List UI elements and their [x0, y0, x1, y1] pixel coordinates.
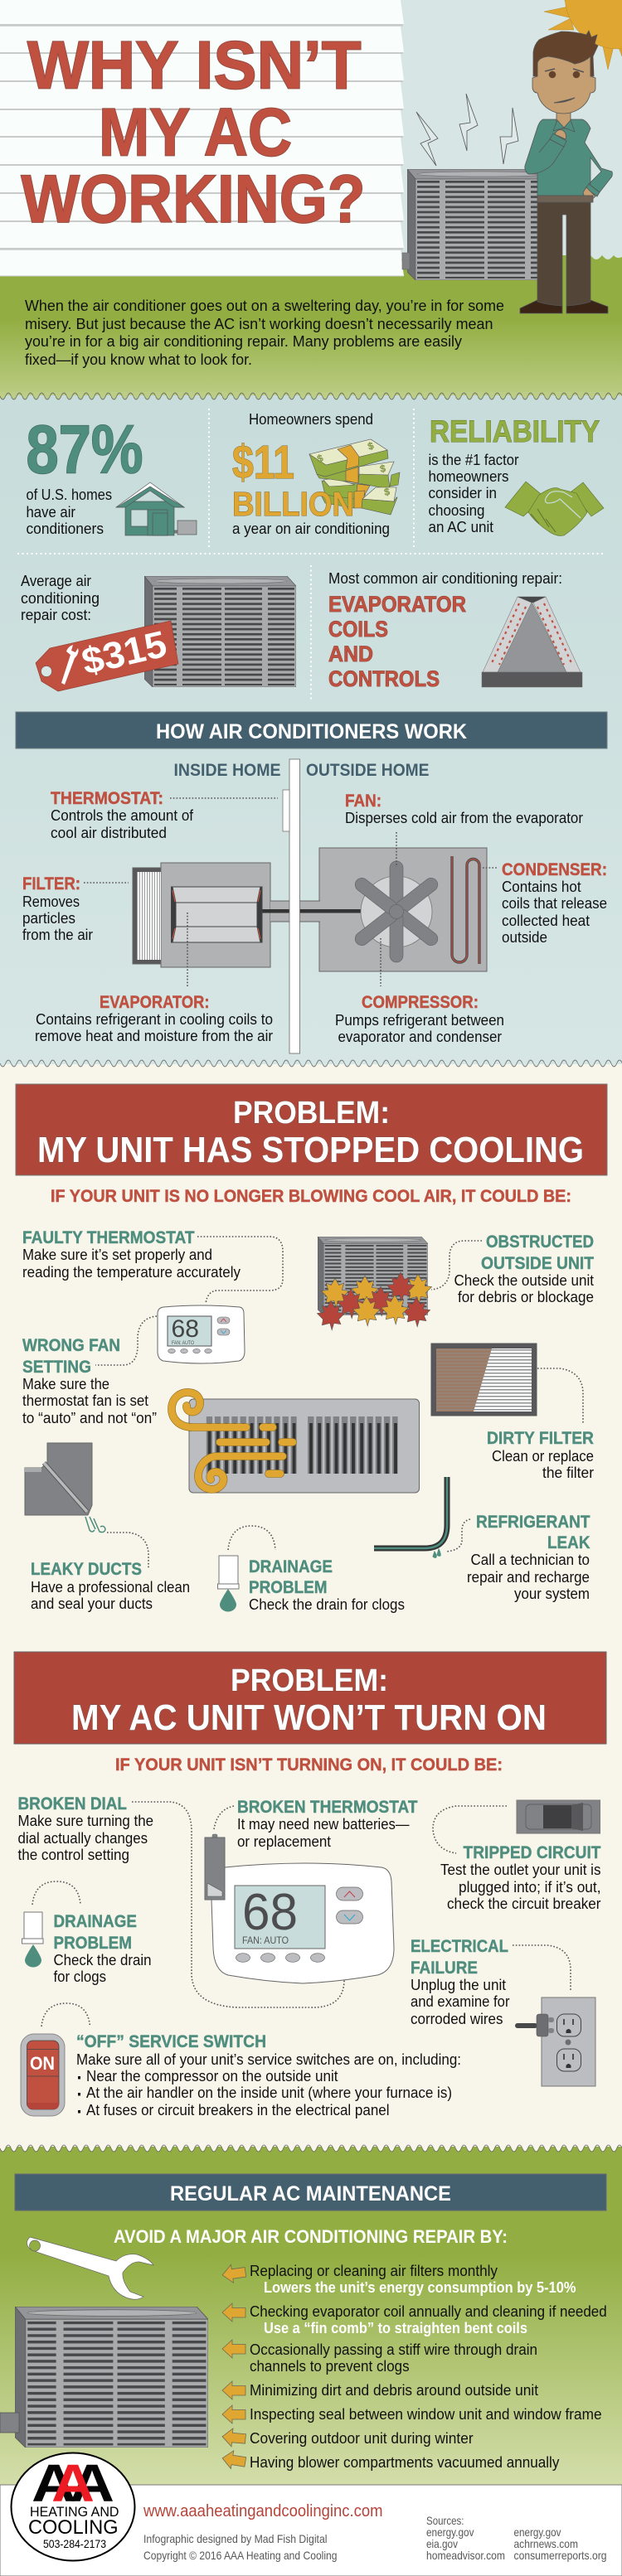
label: fan: [345, 792, 583, 826]
label: compressor: COMPRESSOR:: [362, 993, 479, 1012]
stat caption: of U.S. homes: [27, 487, 112, 503]
label: condenser: [502, 860, 607, 946]
item: tripped circuit text: check the circuit breaker: [447, 1896, 600, 1912]
icon: money stacks: $: [316, 452, 325, 465]
icon: battery: [205, 1834, 225, 1900]
maintenance checklist: [250, 2263, 607, 2471]
stat caption: choosing: [428, 502, 484, 519]
icon: handshake: [505, 482, 604, 535]
label: inside home: INSIDE HOME: [174, 761, 280, 780]
maintenance checklist: Inspecting seal between window unit and window frame: [250, 2406, 602, 2423]
stat caption: conditioners: [27, 521, 104, 537]
stat caption: consider in: [428, 485, 497, 501]
icon: evaporator coil: [482, 597, 582, 687]
item: refrigerant leak text: REFRIGERANT: [476, 1513, 590, 1532]
intro text: When the air conditioner goes out on a sweltering day, you’re in for some: [25, 298, 504, 314]
item: broken dial: BROKEN DIAL: [18, 1794, 127, 1813]
section background: stats and how it works: [0, 395, 622, 1067]
item: obstructed outside unit: for debris or blockage: [458, 1289, 594, 1305]
stat heading: RELIABILITY: [430, 414, 600, 448]
item: dirty filter text: Clean or replace: [492, 1448, 594, 1465]
label: condenser: coils that release: [502, 895, 607, 912]
icon: money stacks: $: [367, 439, 376, 453]
logo: AAA Heating and Cooling: [12, 2453, 134, 2561]
item: drainage problem text: Check the drain: [53, 1952, 151, 1968]
item: obstructed outside unit: Check the outside unit: [454, 1272, 594, 1289]
item: drainage problem text: DRAINAGE: [53, 1912, 137, 1931]
banner: problem 2: [14, 1652, 606, 1744]
item: broken dial: Make sure turning the: [18, 1813, 153, 1829]
panel: most common repair: [328, 570, 582, 691]
stat number: 87%: [27, 411, 143, 487]
intro text: misery. But just because the AC isn’t working doesn’t necessarily mean: [25, 316, 493, 332]
item: off service switch: Near the compressor on the outside unit: [86, 2068, 338, 2085]
section heading: regular AC maintenance: [15, 2174, 606, 2210]
item: drainage problem text: PROBLEM: [249, 1578, 327, 1597]
item: broken thermostat: or replacement: [237, 1833, 331, 1850]
item: electrical failure: and examine for: [411, 1993, 510, 2010]
footer: sources: Sources:: [426, 2514, 464, 2527]
item: dirty filter text: DIRTY FILTER: [487, 1429, 594, 1448]
footer: sources: energy.gov: [514, 2525, 561, 2539]
caption: Most common air conditioning repair:: [328, 570, 562, 587]
label: fan: Disperses cold air from the evaporator: [345, 810, 583, 826]
item: obstructed outside unit: OBSTRUCTED: [486, 1232, 594, 1252]
maintenance checklist: Having blower compartments vacuumed annually: [250, 2454, 559, 2471]
leader lines: problem 2: [32, 1802, 571, 2026]
icon: house with AC: [116, 482, 197, 535]
icon: wrench: [27, 2237, 153, 2299]
subheading: problem 2: IF YOUR UNIT ISN’T TURNING ON, IT COULD BE:: [115, 1755, 503, 1775]
highlighted heading: AND: [328, 642, 373, 666]
item: electrical failure: FAILURE: [411, 1959, 478, 1978]
logo: AAA Heating and Cooling: A: [32, 2453, 76, 2513]
footer: sources: achrnews.com: [514, 2537, 578, 2550]
item: off service switch: At the air handler on the inside unit (where your furnace is): [86, 2085, 452, 2101]
item: electrical failure: corroded wires: [411, 2011, 503, 2027]
item: drainage problem text: PROBLEM: [53, 1934, 132, 1953]
icon: large thermostat: [211, 1863, 394, 1983]
footer: sources: eia.gov: [426, 2537, 458, 2550]
icon: on switch: [21, 2034, 65, 2116]
item: off service switch: At fuses or circuit breakers in the electrical panel: [86, 2102, 390, 2118]
icon: money stacks: [309, 439, 400, 515]
subheading: problem 1: IF YOUR UNIT IS NO LONGER BLOWING COOL AIR, IT COULD BE:: [51, 1187, 571, 1206]
label: filter: FILTER:: [22, 874, 80, 893]
icon: large thermostat: FAN: AUTO: [242, 1934, 289, 1946]
maintenance checklist: channels to prevent clogs: [250, 2358, 410, 2375]
intro text: fixed—if you know what to look for.: [25, 351, 252, 368]
maintenance checklist: Covering outdoor unit during winter: [250, 2430, 474, 2447]
scalloped edge: stats to problems: [0, 1059, 622, 1068]
item: leaky ducts text: LEAKY DUCTS: [31, 1560, 142, 1579]
item: drainage problem text: Check the drain for clogs: [249, 1596, 405, 1613]
stat caption: is the #1 factor: [428, 452, 519, 468]
maintenance checklist: Replacing or cleaning air filters monthly: [250, 2263, 498, 2279]
label: thermostat: THERMOSTAT:: [51, 789, 163, 808]
scalloped edge: grass to stats: [0, 392, 622, 400]
maintenance checklist: Use a “fin comb” to straighten bent coils: [264, 2320, 527, 2336]
caption: [21, 573, 100, 623]
item: refrigerant leak text: your system: [514, 1586, 590, 1602]
item: electrical failure: ELECTRICAL: [411, 1937, 508, 1956]
item: wrong fan setting: Make sure the: [22, 1376, 109, 1392]
icon: small thermostat: 68: [171, 1315, 199, 1343]
item: refrigerant leak text: Call a technician to: [471, 1552, 590, 1568]
title: WHY ISN’T: [27, 28, 362, 103]
logo: AAA Heating and Cooling: 503-284-2173: [43, 2537, 106, 2550]
item: broken dial: dial actually changes: [18, 1830, 148, 1847]
label: compressor: evaporator and condenser: [338, 1029, 502, 1045]
label: filter: particles: [22, 910, 75, 927]
label: thermostat: [51, 789, 194, 841]
item: refrigerant leak text: LEAK: [547, 1533, 590, 1552]
maintenance checklist: Occasionally passing a stiff wire through drain: [250, 2341, 537, 2358]
panel: stat reliability: [428, 414, 604, 535]
label: evaporator: [35, 993, 273, 1044]
leader lines: problem 1: [95, 1237, 583, 1568]
title: [22, 28, 365, 237]
stat caption: [27, 487, 112, 537]
panel: stat 11 billion: [232, 411, 400, 537]
icon: dirty filter: [431, 1344, 537, 1416]
label: evaporator: Contains refrigerant in cooling coils to: [36, 1011, 273, 1028]
item: wrong fan setting: to “auto” and not “on”: [22, 1410, 157, 1426]
icon: drain pipe with drop: [22, 1912, 43, 1968]
illustration: confused man: [520, 31, 612, 313]
diagram: condenser coil: [452, 856, 479, 964]
logo: AAA Heating and Cooling: COOLING: [28, 2516, 118, 2539]
icon: leaky duct: [25, 1443, 105, 1533]
item: electrical failure: Unplug the unit: [411, 1977, 506, 1993]
icon: on switch: ON: [30, 2053, 55, 2074]
stat caption: homeowners: [428, 468, 509, 485]
item: faulty thermostat: FAULTY THERMOSTAT: [22, 1228, 195, 1247]
item: wrong fan setting: SETTING: [22, 1358, 91, 1377]
intro text: you’re in for a big air conditioning repair. Many problems are easily: [25, 333, 462, 350]
label: evaporator: remove heat and moisture from the air: [35, 1028, 273, 1044]
label: fan: FAN:: [345, 792, 381, 811]
item: refrigerant leak text: [467, 1513, 590, 1602]
logo: AAA Heating and Cooling: HEATING AND: [30, 2505, 119, 2520]
item: broken dial: the control setting: [18, 1847, 129, 1863]
section background: footer: [0, 2485, 622, 2576]
item: off service switch: Make sure all of your unit’s service switches are on, including:: [76, 2051, 461, 2068]
illustration: sun: [544, 0, 622, 70]
caption: repair cost:: [21, 607, 91, 623]
footer: website: www.aaaheatingandcoolinginc.com: [143, 2502, 383, 2520]
icon: arrows: [221, 2263, 247, 2471]
item: electrical failure: [411, 1937, 510, 2027]
footer: credits: [143, 2532, 337, 2562]
item: tripped circuit text: plugged into; if it’s out,: [459, 1879, 600, 1896]
label: condenser: CONDENSER:: [502, 860, 607, 879]
item: wrong fan setting: thermostat fan is set: [22, 1392, 148, 1409]
item: faulty thermostat: Make sure it’s set properly and: [22, 1247, 212, 1263]
section heading: regular AC maintenance: REGULAR AC MAINTENANCE: [170, 2182, 451, 2206]
panel: average repair cost: [21, 573, 296, 691]
icon: small thermostat: [158, 1305, 245, 1363]
icon: drain pipe with drop: [217, 1556, 239, 1611]
item: broken thermostat: It may need new batteries—: [237, 1816, 410, 1833]
maintenance checklist: Checking evaporator coil annually and cleaning if needed: [250, 2303, 607, 2320]
item: off service switch: [76, 2032, 461, 2118]
illustration: large AC unit: [0, 2307, 208, 2448]
illustration: AC unit covered in leaves: [317, 1237, 432, 1330]
item: faulty thermostat: [22, 1228, 241, 1281]
item: obstructed outside unit: [454, 1232, 594, 1305]
diagram: wall thermostat: [283, 790, 289, 831]
item: dirty filter text: [487, 1429, 594, 1481]
caption: conditioning: [21, 590, 100, 607]
footer: sources: homeadvisor.com: [426, 2549, 505, 2562]
label: condenser: collected heat: [502, 913, 590, 929]
diagram: indoor unit box: [161, 863, 270, 967]
item: tripped circuit text: [440, 1843, 601, 1912]
banner: problem 1: [16, 1084, 607, 1175]
illustration: AC unit: [144, 576, 296, 687]
icon: price tag: [36, 621, 178, 691]
icon: refrigerant pipe with leak: [374, 1477, 447, 1557]
diagram: fan: [352, 861, 440, 962]
item: obstructed outside unit: OUTSIDE UNIT: [481, 1254, 594, 1273]
footer: sources: [426, 2514, 607, 2562]
stat number: $11: [232, 436, 294, 489]
highlighted heading: COILS: [328, 617, 388, 642]
footer: sources: energy.gov: [426, 2525, 474, 2539]
leader lines: [84, 798, 498, 986]
subheading: avoid a major repair: AVOID A MAJOR AIR CONDITIONING REPAIR BY:: [114, 2226, 508, 2247]
item: refrigerant leak text: repair and recharge: [467, 1569, 590, 1586]
highlighted heading: EVAPORATOR: [328, 592, 466, 617]
item: broken dial: [18, 1794, 153, 1863]
diagram: outdoor unit box: [319, 848, 487, 971]
scalloped edge: problems to maintenance: [0, 2144, 622, 2152]
diagram: wall: [289, 759, 300, 1053]
section background: hero sky: [0, 0, 622, 274]
stat caption: [428, 452, 519, 535]
stat number: BILLION: [232, 485, 354, 523]
diagram: evaporator: [171, 887, 262, 942]
maintenance checklist: Lowers the unit’s energy consumption by 5-10%: [264, 2279, 576, 2296]
item: broken thermostat: [237, 1798, 418, 1850]
divider dots: [17, 409, 603, 700]
highlighted heading: [328, 592, 466, 691]
item: leaky ducts text: Have a professional clean: [31, 1579, 190, 1595]
item: drainage problem text: for clogs: [53, 1968, 106, 1985]
section background: maintenance: [0, 2147, 622, 2485]
item: faulty thermostat: reading the temperature accurately: [22, 1264, 241, 1281]
label: filter: Removes: [22, 893, 80, 910]
icon: money stacks: $: [379, 462, 386, 475]
section background: problem panels: [0, 1064, 622, 2150]
logo: AAA Heating and Cooling: A: [70, 2453, 114, 2513]
item: dirty filter text: the filter: [542, 1465, 594, 1481]
footer: credits: Copyright © 2016 AAA Heating and Cooling: [143, 2549, 337, 2562]
item: off service switch: “OFF” SERVICE SWITCH: [76, 2032, 266, 2051]
section background: hero grass: [0, 255, 622, 398]
item: wrong fan setting: WRONG FAN: [22, 1336, 120, 1355]
section heading: how air conditioners work: [16, 712, 607, 748]
label: outside home: OUTSIDE HOME: [306, 761, 430, 780]
stat caption: have air: [27, 504, 75, 521]
item: broken thermostat: BROKEN THERMOSTAT: [237, 1798, 418, 1817]
icon: money stacks: $: [383, 486, 391, 498]
label: thermostat: Controls the amount of: [51, 807, 194, 824]
label: compressor: Pumps refrigerant between: [335, 1012, 504, 1029]
maintenance checklist: Minimizing dirt and debris around outside unit: [250, 2382, 538, 2399]
label: condenser: Contains hot: [502, 879, 581, 895]
banner: problem 2: MY AC UNIT WON’T TURN ON: [71, 1697, 547, 1738]
footer: sources: consumerreports.org: [514, 2549, 607, 2562]
banner: problem 1: PROBLEM:: [233, 1096, 390, 1131]
icon: wall outlet and plug: [515, 1997, 595, 2086]
label: thermostat: cool air distributed: [51, 825, 167, 841]
label: condenser: outside: [502, 929, 547, 946]
lead text: Homeowners spend: [249, 411, 373, 428]
label: evaporator: EVAPORATOR:: [100, 993, 209, 1012]
banner: problem 2: PROBLEM:: [231, 1663, 388, 1698]
caption: Average air: [21, 573, 91, 589]
panel: stat 87 percent: [27, 411, 197, 537]
highlighted heading: CONTROLS: [328, 666, 440, 691]
stat caption: a year on air conditioning: [232, 521, 390, 537]
logo: AAA Heating and Cooling: A: [51, 2453, 95, 2513]
title: WORKING?: [22, 162, 365, 237]
panel: how air conditioners work diagram: [22, 759, 607, 1053]
item: drainage problem text: [249, 1557, 405, 1613]
item: leaky ducts text: and seal your ducts: [31, 1595, 153, 1612]
label: filter: from the air: [22, 927, 93, 943]
icon: price tag: $315: [78, 622, 171, 683]
icon: small thermostat: FAN: AUTO: [172, 1341, 194, 1346]
item: wrong fan setting: [22, 1336, 157, 1426]
item: drainage problem text: [53, 1912, 151, 1985]
item: tripped circuit text: TRIPPED CIRCUIT: [463, 1843, 601, 1862]
diagram: filter: [133, 868, 161, 964]
icon: large thermostat: 68: [242, 1884, 298, 1941]
label: filter: [22, 874, 93, 943]
banner: problem 1: MY UNIT HAS STOPPED COOLING: [37, 1130, 584, 1170]
stat number: [232, 436, 354, 523]
stat caption: an AC unit: [428, 519, 493, 535]
item: drainage problem text: DRAINAGE: [249, 1557, 333, 1576]
item: leaky ducts text: [31, 1560, 190, 1612]
title: MY AC: [99, 94, 292, 171]
icon: vent with airflow swirls: [172, 1392, 420, 1493]
intro text: [25, 298, 504, 368]
diagram: connector duct: [262, 901, 362, 922]
section heading: how air conditioners work: HOW AIR CONDITIONERS WORK: [156, 720, 467, 743]
icon: tripped circuit switch: [517, 1800, 600, 1833]
label: compressor: [335, 993, 504, 1045]
footer: credits: Infographic designed by Mad Fish Digital: [143, 2532, 327, 2545]
illustration: broken outdoor AC unit: [402, 169, 559, 280]
icon: lightning bolts: [416, 94, 518, 166]
item: tripped circuit text: Test the outlet your unit is: [440, 1862, 600, 1878]
illustration: house siding: [0, 0, 404, 277]
